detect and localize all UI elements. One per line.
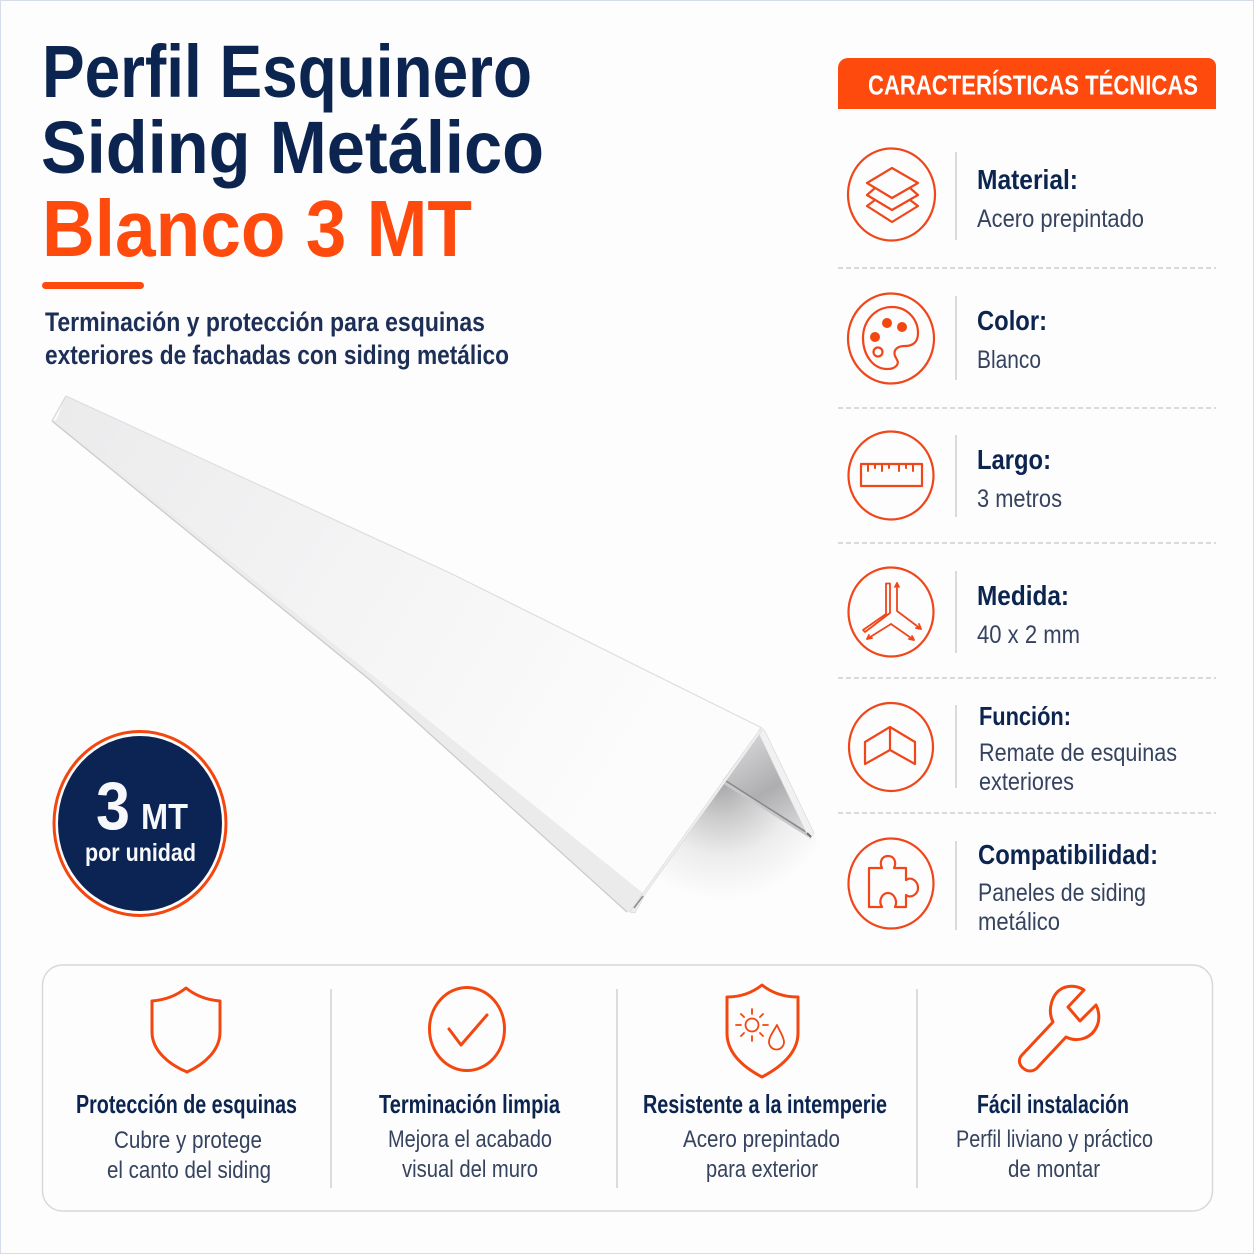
text: protección de esquinas: Protección de esquinas xyxy=(76,1089,297,1119)
subtitle: exteriores de fachadas con siding metálico xyxy=(45,340,509,370)
title xyxy=(41,30,544,273)
text: material: Acero prepintado xyxy=(977,205,1144,233)
text: medida xyxy=(977,580,1080,649)
text: protección de esquinas: Cubre y protege xyxy=(114,1127,262,1154)
text: medida: 40 x 2 mm xyxy=(977,621,1080,649)
badge: 3 MT por unidad xyxy=(54,732,226,916)
text: resistente a la intemperie: para exterior xyxy=(706,1156,818,1183)
title: Siding Metálico xyxy=(41,106,544,189)
icon: profile dimensions xyxy=(848,568,934,656)
icon: material layers xyxy=(848,148,935,240)
badge: 3 MT por unidad: MT xyxy=(141,796,188,837)
badge: 3 MT por unidad: 3 xyxy=(96,768,130,844)
icon: weather shield xyxy=(727,985,798,1077)
icon: color palette xyxy=(848,294,934,384)
title: Perfil Esquinero xyxy=(42,30,532,113)
title: Blanco 3 MT xyxy=(42,184,472,273)
text: fácil instalación: Fácil instalación xyxy=(977,1089,1129,1119)
text: resistente a la intemperie xyxy=(643,1089,887,1183)
text: función xyxy=(979,701,1177,796)
text: función: Función: xyxy=(979,701,1071,731)
text: material: Material: xyxy=(977,164,1078,195)
text: protección de esquinas xyxy=(76,1089,297,1184)
panel: características técnicas xyxy=(838,58,1216,936)
panel: benefits xyxy=(42,965,1212,1211)
text: largo: 3 metros xyxy=(977,485,1062,513)
badge: 3 MT por unidad: por unidad xyxy=(85,839,196,867)
text: fácil instalación: de montar xyxy=(1008,1156,1100,1183)
text: color xyxy=(977,305,1047,374)
text: terminación limpia: Mejora el acabado xyxy=(388,1126,552,1153)
text: resistente a la intemperie: Resistente a la intemperie xyxy=(643,1089,887,1119)
text: terminación limpia xyxy=(379,1089,560,1183)
text: compatibilidad: Compatibilidad: xyxy=(978,839,1158,870)
text: función: Remate de esquinas xyxy=(979,739,1177,767)
icon: puzzle piece xyxy=(848,838,934,928)
product image: white corner profile xyxy=(52,396,850,915)
text: terminación limpia: Terminación limpia xyxy=(379,1089,560,1119)
text: color: Blanco xyxy=(977,346,1041,374)
heading: características técnicas xyxy=(838,58,1216,109)
title underline accent xyxy=(42,282,144,289)
text: terminación limpia: visual del muro xyxy=(402,1156,538,1183)
icon: wrench xyxy=(1019,986,1099,1071)
text: material xyxy=(977,164,1144,233)
text: protección de esquinas: el canto del siding xyxy=(107,1157,271,1184)
text: color: Color: xyxy=(977,305,1047,336)
text: largo: Largo: xyxy=(977,444,1051,475)
text: compatibilidad xyxy=(978,839,1158,936)
subtitle: Terminación y protección para esquinas xyxy=(45,307,485,337)
text: función: exteriores xyxy=(979,768,1074,796)
text: compatibilidad: metálico xyxy=(978,908,1060,936)
subtitle xyxy=(45,307,509,370)
text: fácil instalación xyxy=(956,1089,1153,1183)
text: fácil instalación: Perfil liviano y práctico xyxy=(956,1126,1153,1153)
text: largo xyxy=(977,444,1062,513)
icon: check circle xyxy=(430,988,504,1070)
icon: shield xyxy=(152,988,220,1072)
text: resistente a la intemperie: Acero prepintado xyxy=(683,1126,840,1153)
icon: exterior corner xyxy=(849,703,933,791)
text: medida: Medida: xyxy=(977,580,1069,611)
icon: length ruler xyxy=(848,432,934,520)
text: compatibilidad: Paneles de siding xyxy=(978,879,1146,907)
